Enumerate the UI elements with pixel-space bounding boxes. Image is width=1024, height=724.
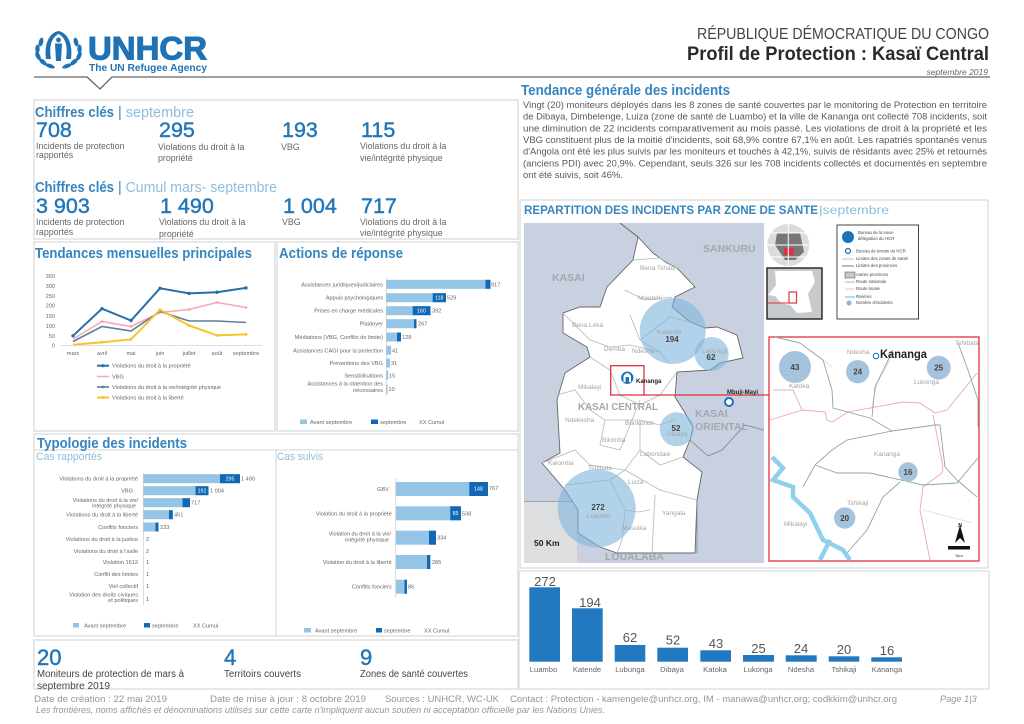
heading: key figures cumulative: Chiffres clés <box>35 180 114 196</box>
line chart: 250 <box>46 294 55 300</box>
health zone labels: Bena Tshadi <box>640 265 676 272</box>
figure: 193: 193 <box>282 118 318 142</box>
province labels: KASAI <box>552 272 585 284</box>
Kananga city label: Kananga <box>880 347 927 361</box>
figure: 1 004: VBG <box>282 217 301 227</box>
figure: 193: VBG <box>281 142 300 152</box>
bar chart: followed cases: GBV <box>377 487 389 493</box>
figure: 295: Violations du droit à la <box>158 142 245 152</box>
line chart: 0 <box>52 344 55 350</box>
red locator box and leader line <box>611 366 769 395</box>
incident counts: 43 <box>791 363 800 372</box>
heading: map: REPARTITION DES INCIDENTS PAR ZONE DE SANTE <box>524 203 818 217</box>
roads <box>770 373 977 560</box>
legend: response actions: Avant septembre <box>310 420 352 426</box>
line chart legend: Violations du droit à la propriété <box>112 364 191 370</box>
figure: 3 903: Incidents de protection <box>36 217 125 227</box>
text block: trend paragraph: Vingt (20) moniteurs déployés dans les 8 zones de santé couvertes par le monitoring de Protection en territoire <box>523 100 987 110</box>
province labels <box>552 243 756 563</box>
bar chart: reported cases: Violations du droit à la vie/ <box>73 498 138 504</box>
bar chart: followed cases: Conflits fonciers <box>352 585 392 591</box>
province labels: KASAI <box>695 408 728 420</box>
sub-panel: reported cases: Cas rapportés <box>36 451 102 463</box>
bar chart: response actions: 15 <box>389 373 395 379</box>
text block: trend paragraph: d'Angola ont été les plus suivis par les moniteurs et touchés à 42,1%, suivis de résidants avec 25% et retournés <box>523 147 988 157</box>
inset map: Kananga detail <box>769 337 979 561</box>
bar chart: reported cases: Conflit des limites <box>94 572 138 578</box>
logo: UNHCR <box>34 30 207 74</box>
province labels: ORIENTAL <box>695 421 748 433</box>
bar values: 52 <box>666 632 680 648</box>
icon: UNHCR emblem <box>34 31 83 70</box>
figure: 4 territories: 4 <box>224 645 236 670</box>
bar chart: response actions: 118 <box>435 296 444 302</box>
health zone labels: Masuika <box>622 525 647 532</box>
legend: followed cases: Avant septembre <box>315 628 357 634</box>
bar values: 24 <box>794 641 808 656</box>
bar names: Ndesha <box>788 665 815 674</box>
globe locator <box>767 224 809 266</box>
figure: 9 health zones: Zones de santé couvertes <box>360 669 468 680</box>
bar chart: response actions: 128 <box>402 335 411 341</box>
heading: monthly trends: Tendances mensuelles principales <box>35 246 252 262</box>
bar values: 43 <box>709 636 723 651</box>
health zone labels: Lubondaie <box>640 451 671 458</box>
bar chart: reported cases: VBG <box>121 489 133 495</box>
bar chart: followed cases: intégrité physique <box>345 538 389 544</box>
bar chart: reported cases: 717 <box>191 501 200 507</box>
figure: 1 490: propriété <box>159 229 194 239</box>
figure: 193 <box>281 118 318 152</box>
line chart: juin <box>155 351 164 357</box>
bar chart: reported cases: Violation des droits civiques <box>69 592 138 598</box>
health zone labels: Kalomba <box>548 460 574 467</box>
line chart: 200 <box>46 304 55 310</box>
figure: 1 004: 1 004 <box>283 194 337 218</box>
bar chart: followed cases: 86 <box>408 585 414 591</box>
icon: north arrow and scale: N <box>958 523 962 529</box>
figure: 708: Incidents de protection <box>36 141 125 151</box>
figure: 115: 115 <box>361 118 395 142</box>
incident counts: 62 <box>707 353 716 362</box>
figure: 1 490: 1 490 <box>160 194 214 218</box>
panel: incidents bar chart by zone <box>519 571 989 689</box>
heading suffix: map: |septembre <box>819 203 889 217</box>
zone labels <box>784 340 979 528</box>
figure: 708: 708 <box>36 118 72 142</box>
health zone labels: Lubunga <box>702 348 728 355</box>
health zone labels: Mwetshi <box>638 295 662 302</box>
figure: 4 territories: Territoirs couverts <box>224 669 301 680</box>
line chart: 100 <box>46 324 55 330</box>
panel: monthly trends <box>34 242 275 431</box>
health zone labels: Dibaya <box>667 431 688 438</box>
map legend: Nombre d'incidents <box>856 300 893 305</box>
bar names: Tshikaji <box>832 665 857 674</box>
bar chart: response actions: 917 <box>491 282 500 288</box>
heading suffix: september: | septembre <box>118 105 194 121</box>
sub-panel: followed cases <box>277 451 498 634</box>
legend: reported cases: XX Cumul <box>193 624 218 630</box>
report title: Profil de Protection : Kasaï Central <box>687 44 989 65</box>
sub-panel: reported cases <box>36 451 255 630</box>
figure: 115 <box>360 118 447 163</box>
incident counts: 24 <box>853 368 863 377</box>
incident counts: 194 <box>665 335 679 344</box>
map legend: Limites des provinces <box>856 263 897 268</box>
bar chart: reported cases: 2 <box>146 537 149 543</box>
bar names: Lubunga <box>615 665 646 674</box>
line chart <box>46 274 262 357</box>
legend: reported cases: Avant septembre <box>84 624 126 630</box>
bar chart: reported cases: Violation 1612 <box>103 560 138 566</box>
figure: 20 monitors <box>37 645 184 692</box>
health zone labels: Mikalayi <box>578 384 601 391</box>
bar chart: reported cases: 1 490 <box>241 477 255 483</box>
figure: 4 territories <box>224 645 301 680</box>
line chart: 300 <box>46 284 55 290</box>
bar chart: reported cases: 295 <box>226 477 234 483</box>
bar names: Kananga <box>872 665 903 674</box>
bar chart: response actions: Appuis psychologiques <box>326 296 383 302</box>
text block: trend paragraph: de Dibaya, Dimbelenge, Luiza (zone de santé de Luambo) et la ville de Kananga ont collecté 708 incidents, soit <box>523 112 988 122</box>
province labels: KASAI CENTRAL <box>578 401 659 413</box>
health zone labels: Ndekesha <box>565 417 595 424</box>
bar chart: response actions: 31 <box>391 361 397 367</box>
line chart: mars <box>67 351 79 357</box>
line chart: septembre <box>233 351 259 357</box>
country title: RÉPUBLIQUE DÉMOCRATIQUE DU CONGO <box>697 24 989 43</box>
incident counts: 272 <box>591 503 605 512</box>
health zone labels: Yangala <box>662 510 686 517</box>
incident counts: 52 <box>672 424 681 433</box>
bar chart: reported cases: et politiques <box>108 598 138 604</box>
icon: UNHCR delegation office: Kananga <box>636 379 662 385</box>
figure: 115: vie/intégrité physique <box>360 153 443 163</box>
bar chart: followed cases: Violation du droit à la liberté <box>323 560 392 566</box>
figure: 3 903: rapportés <box>36 227 74 237</box>
map legend: Rivières <box>856 294 872 299</box>
line chart: mai <box>126 351 136 357</box>
incident counts <box>591 335 716 512</box>
bar chart: followed cases <box>316 478 498 598</box>
footer: sources: Sources : UNHCR, WC-UK <box>385 694 500 704</box>
bar chart: reported cases <box>59 473 255 605</box>
zone labels: Ndesha <box>847 349 870 356</box>
bar chart: reported cases: Conflits fonciers <box>98 525 138 531</box>
health zone labels: Katende <box>657 329 682 336</box>
bar chart: response actions: Assistances CAGI pour la protection <box>293 348 383 354</box>
bar chart: followed cases: 285 <box>432 560 441 566</box>
province labels: SANKURU <box>703 243 756 255</box>
bar chart: reported cases: 1 004 <box>210 489 224 495</box>
bar names: Katende <box>573 665 601 674</box>
figure: 295: 295 <box>159 118 195 142</box>
footer: update date: Date de mise à jour : 8 octobre 2019 <box>210 694 366 704</box>
legend: followed cases: septembre <box>384 628 410 634</box>
bar chart: response actions: Assistances à la obtention des <box>307 382 383 388</box>
zone labels: Tshibala <box>955 340 979 347</box>
bar names: Dibaya <box>660 665 685 674</box>
zone labels: Lukonga <box>914 379 939 386</box>
map legend: Limites des zones de santé <box>856 256 909 261</box>
bar chart: reported cases: 1 <box>146 560 149 566</box>
heading: incident typology: Typologie des incidents <box>37 436 187 452</box>
proportional circles <box>558 298 729 547</box>
icon: north arrow and scale: 3km <box>955 553 963 558</box>
bar chart: reported cases: 2 <box>146 549 149 555</box>
bar chart: reported cases: 192 <box>198 489 206 495</box>
bar chart: response actions: nécessaires <box>353 388 383 394</box>
panel: coverage figures <box>34 640 518 692</box>
footer: creation date: Date de création : 22 mai 2019 <box>34 694 167 704</box>
bar chart: response actions: Préventions des VBG <box>330 361 383 367</box>
panel: response actions <box>277 242 518 431</box>
icon: legend delegation office <box>842 231 854 243</box>
bar chart: reported cases: 451 <box>174 513 183 519</box>
bar chart: reported cases: Violations du droit à la justice <box>66 537 138 543</box>
line chart: 350 <box>46 274 55 280</box>
line chart legend: Violations du droit à la vie/intégrité physique <box>112 385 221 391</box>
bar values: 25 <box>751 641 766 656</box>
bar chart: reported cases: Violations du droit à l'asile <box>74 549 138 555</box>
bars <box>529 587 902 662</box>
icon: north arrow and scale <box>948 523 970 558</box>
figure: 717 <box>360 194 447 238</box>
bar chart: reported cases: 1 <box>146 597 149 603</box>
zone labels: Kananga <box>874 451 900 458</box>
line chart legend: Violations du droit à la liberté <box>112 396 184 402</box>
logo tagline: The UN Refugee Agency <box>89 62 207 74</box>
map legend: Bureau de la sous- <box>858 230 895 235</box>
bar names: Luambo <box>530 665 557 674</box>
bar chart: reported cases: intégrité physique <box>92 504 136 510</box>
incident counts <box>791 363 944 523</box>
line chart: août <box>212 351 223 357</box>
legend: response actions <box>300 420 444 426</box>
bar names <box>530 665 903 674</box>
bar chart: reported cases: 1 <box>146 572 149 578</box>
health zone lines <box>775 337 978 553</box>
line chart legend <box>97 364 221 402</box>
proportional circles <box>779 351 951 529</box>
province labels: LOUALABA <box>605 551 664 563</box>
map legend: Route nationale <box>856 279 887 284</box>
map legend <box>837 225 918 319</box>
bar chart: reported cases: Viol collectif <box>109 584 138 590</box>
heading: key figures september: Chiffres clés <box>35 105 114 121</box>
line chart: 150 <box>46 314 55 320</box>
figure: 9 health zones <box>360 645 468 680</box>
zone labels: Mikalayi <box>784 521 807 528</box>
bar chart: followed cases: 334 <box>437 536 446 542</box>
bar chart: followed cases: Violation du droit à la propriété <box>316 511 392 517</box>
bar values: 62 <box>623 630 637 645</box>
figure: 20 monitors: 20 <box>37 645 61 670</box>
header rule with chevron <box>34 77 990 89</box>
health zone boundaries <box>542 258 697 553</box>
incident counts: 25 <box>934 364 944 373</box>
province borders in grey <box>690 425 764 553</box>
health zone labels: Bunkonde <box>625 420 655 427</box>
figure: 9 health zones: 9 <box>360 645 372 670</box>
map legend: délégation du HCR <box>858 236 894 241</box>
zone labels: Katoka <box>789 383 810 390</box>
icon: Mbuji-Mayi field office: Mbuji-Mayi <box>727 390 758 396</box>
figure: 20 monitors: Moniteurs de protection de mars à <box>37 669 184 680</box>
footer: page number: Page 1|3 <box>940 694 978 704</box>
figure: 115: Violations du droit à la <box>360 141 447 151</box>
footer: contact: Contact : Protection - kamengele@unhcr.org, IM - manawa@unhcr.org; codkkim@unhcr.org <box>510 694 897 704</box>
footer: disclaimer: Les frontières, noms affichés et dénominations utilisés sur cette carte n'impliquent aucun soutien ni acceptation officielle par les Nations Unies. <box>36 705 605 715</box>
health zone labels: Bena Leka <box>572 322 603 329</box>
line chart legend: VBG <box>112 374 124 380</box>
bar values: 194 <box>579 595 601 610</box>
figure: 295: propriété <box>158 153 193 163</box>
bar chart: followed cases: 538 <box>462 511 471 517</box>
bar chart: followed cases: 148 <box>474 486 483 492</box>
scale label: 50 Km <box>534 538 560 548</box>
incident counts: 16 <box>904 468 913 477</box>
map legend: Autres provinces <box>856 272 888 277</box>
map legend: Route locale <box>856 286 880 291</box>
legend: response actions: septembre <box>380 420 406 426</box>
bar chart: response actions: 267 <box>418 322 427 328</box>
figure: 1 490 <box>159 194 246 239</box>
bar chart: reported cases: Violations du droit à la liberté <box>66 513 138 519</box>
panel: incident typology <box>34 434 518 636</box>
figure: 717: vie/intégrité physique <box>360 228 443 238</box>
figure: 708: rapportés <box>36 150 74 160</box>
line chart: 50 <box>49 334 55 340</box>
health zone labels: Ndesha <box>632 348 655 355</box>
bar chart: response actions: 10 <box>388 387 395 393</box>
logo wordmark: UNHCR <box>88 30 207 66</box>
panel: key figures <box>34 100 518 239</box>
text block: trend paragraph: ont été suivis, soit 46%. <box>523 170 623 180</box>
bar chart: response actions: Prises en charge médicales <box>314 309 383 315</box>
legend: response actions: XX Cumul <box>419 420 444 426</box>
bar names: Katoka <box>703 665 728 674</box>
bar chart: response actions: 41 <box>392 348 398 354</box>
bar chart: followed cases: 85 <box>453 511 459 517</box>
figure: 295 <box>158 118 245 163</box>
panel: incidents by health zone map <box>520 200 988 568</box>
figure: 717: Violations du droit à la <box>360 217 447 227</box>
bar values: 20 <box>837 642 851 657</box>
text block: trend paragraph: une diminution de 22 incidents comparativement au mois passé. Les violations de droit à la propriété et les <box>523 123 988 133</box>
health zone labels: Tshibala <box>588 465 612 472</box>
bar names: Lukonga <box>743 665 773 674</box>
text block: trend paragraph <box>523 100 988 180</box>
line chart: avril <box>97 351 107 357</box>
bar chart: reported cases: 233 <box>160 525 169 531</box>
inset map: DRC locator <box>767 268 822 319</box>
heading suffix: cumulative: | Cumul mars- septembre <box>118 180 277 196</box>
incident counts: 20 <box>840 514 850 523</box>
bar chart: followed cases: Violation du droit à la vie/ <box>329 532 391 538</box>
legend: reported cases <box>73 623 218 630</box>
bar chart: response actions: 392 <box>432 309 441 315</box>
figure: 3 903: 3 903 <box>36 194 90 218</box>
bar chart: response actions: Plaidoyer <box>360 322 383 328</box>
minor roads <box>810 350 973 523</box>
bar chart: response actions: 160 <box>417 309 426 315</box>
bar chart: response actions: 529 <box>447 296 456 302</box>
bar values <box>534 574 894 658</box>
bar chart: reported cases: 1 <box>146 584 149 590</box>
title block <box>687 24 989 77</box>
health zone labels: Luiza <box>628 479 644 486</box>
bar chart: response actions: Assistances juridiques/judiciaires <box>301 282 383 288</box>
figure: 708 <box>36 118 125 160</box>
map legend: Bureau de terrain du HCR <box>856 248 906 254</box>
bar chart: response actions <box>293 278 500 396</box>
bar chart: followed cases: 767 <box>489 486 498 492</box>
health zone labels <box>548 265 728 532</box>
icon: UNHCR delegation office <box>621 372 662 385</box>
bar values: 272 <box>534 574 556 589</box>
river <box>772 457 850 560</box>
text block: trend paragraph: (anciens PDI) avec 20,9%. Cependant, seuls 326 sur les 708 incidents collectés et documentés en septembre <box>523 158 987 168</box>
bar values: 16 <box>880 643 894 658</box>
sub-panel: followed cases: Cas suivis <box>277 451 323 463</box>
heading: general trend: Tendance générale des incidents <box>521 83 730 99</box>
legend: reported cases: septembre <box>152 624 178 630</box>
bar chart: reported cases: Violations du droit à la propriété <box>59 477 138 483</box>
health zone labels: Bilomba <box>602 437 626 444</box>
legend: followed cases: XX Cumul <box>424 628 449 634</box>
main map <box>524 223 769 563</box>
text block: trend paragraph: VBG constituent plus de la moitié d'incidents, soit 68,9% contre 67,1% en août. Les rapatriés spontanés venus <box>523 135 988 145</box>
figure: 3 903 <box>36 194 125 237</box>
line chart: juillet <box>182 351 196 357</box>
figure: 20 monitors: septembre 2019 <box>37 681 110 692</box>
health zone labels: Demba <box>604 346 625 353</box>
legend: followed cases <box>304 628 449 634</box>
footer <box>34 694 978 715</box>
figure: 717: 717 <box>361 194 397 218</box>
icon: Mbuji-Mayi field office <box>725 390 758 406</box>
heading: response actions: Actions de réponse <box>279 246 403 262</box>
figure: 1 490: Violations du droit à la <box>159 217 246 227</box>
bar chart: response actions: Médiations (VBG, Conflits de limite) <box>295 335 383 341</box>
report date: septembre 2019 <box>927 67 988 77</box>
bar chart: response actions: Sensibilisations <box>344 373 383 379</box>
zone labels: Tshikaji <box>847 500 868 507</box>
panel: general trend <box>521 83 988 180</box>
health zone labels: Luambo <box>587 513 611 520</box>
